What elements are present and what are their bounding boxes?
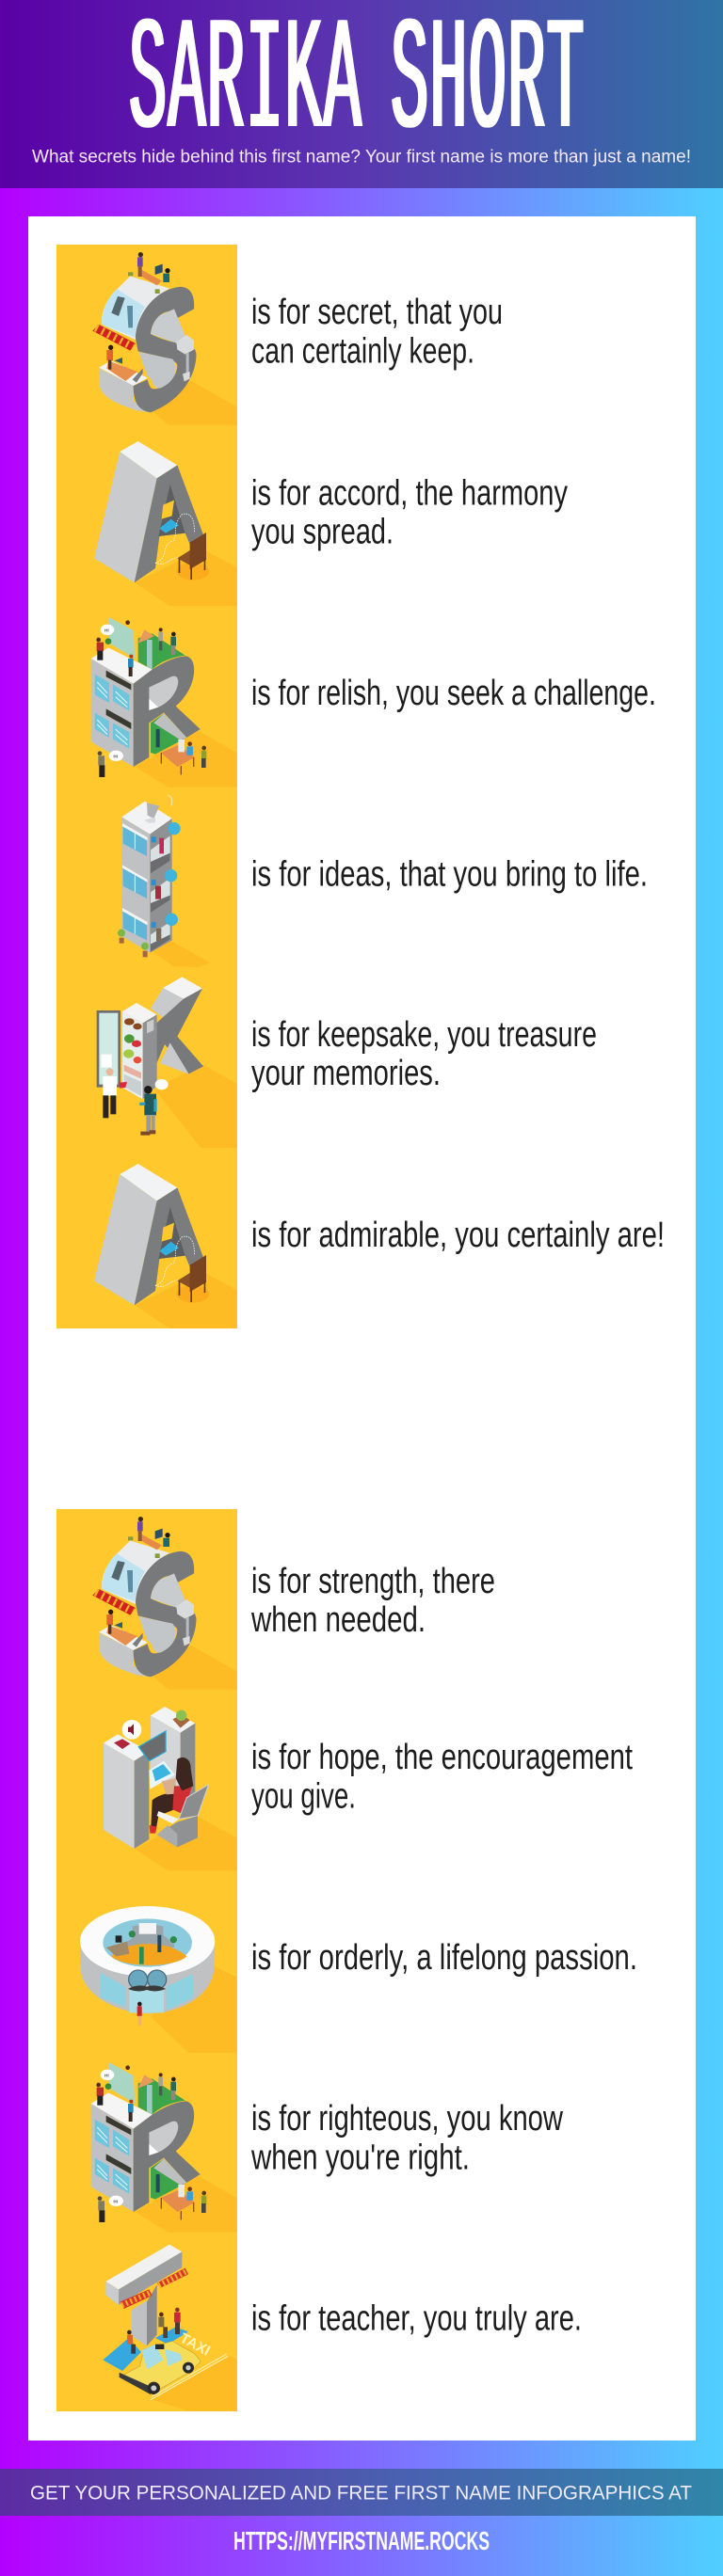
text: H is for hope: you give. bbox=[251, 1776, 356, 1816]
icon: letter H desk bbox=[104, 1707, 237, 1870]
text: A is for accord bbox=[251, 474, 568, 551]
yellow column: last name bbox=[56, 1509, 237, 2411]
icon: letter S building bbox=[92, 252, 237, 425]
text: R is for righteous bbox=[250, 2099, 563, 2177]
header band bbox=[0, 0, 723, 188]
icon: letter R building (repeat): HI bbox=[104, 2073, 109, 2077]
icon: letter R building (repeat) bbox=[91, 2062, 237, 2233]
text: S is for strength bbox=[250, 1562, 495, 1640]
text: K is for keepsake: is for keepsake, you treasure bbox=[251, 1015, 597, 1055]
text: K is for keepsake bbox=[251, 1015, 597, 1093]
text: S is for secret: is for secret, that you bbox=[251, 293, 503, 332]
icon: letter R building bbox=[91, 617, 237, 787]
icon: letter R building: HI bbox=[113, 754, 118, 758]
text: S is for secret: can certainly keep. bbox=[251, 331, 474, 371]
text: R is for righteous: is for righteous, you know bbox=[251, 2099, 563, 2139]
white panel bbox=[28, 216, 696, 2441]
icon: letter A with chair (repeat) bbox=[94, 1164, 237, 1328]
text: S is for secret bbox=[251, 293, 503, 371]
icon: letter R building: HI bbox=[104, 628, 109, 632]
icon: letter R building (repeat): HI bbox=[113, 2199, 118, 2203]
yellow column: first name bbox=[56, 245, 237, 1328]
text: S is for strength: is for strength, there bbox=[251, 1562, 495, 1601]
icon: letter K with fridge and chef bbox=[97, 977, 237, 1148]
text: S is for strength: when needed. bbox=[250, 1600, 426, 1640]
text: R is for righteous: when you're right. bbox=[250, 2138, 470, 2177]
text: A is for accord: is for accord, the harmony bbox=[251, 474, 568, 514]
icon: letter O ring building bbox=[80, 1906, 237, 2053]
footer call to action: GET YOUR PERSONALIZED AND FREE FIRST NAME INFOGRAPHICS AT bbox=[30, 2482, 692, 2504]
icon: letter A with chair bbox=[94, 441, 237, 606]
footer band bbox=[0, 2469, 723, 2516]
footer url: HTTPS://MYFIRSTNAME.ROCKS bbox=[233, 2526, 490, 2555]
text: H is for hope bbox=[251, 1738, 633, 1816]
icon: letter I tower bbox=[118, 795, 210, 967]
subtitle: What secrets hide behind this first name? Your first name is more than just a name! bbox=[32, 147, 691, 167]
icon: letter T taxi stand: TAXI bbox=[177, 2330, 213, 2360]
text: A is for accord: you spread. bbox=[251, 512, 394, 551]
text: K is for keepsake: your memories. bbox=[251, 1054, 441, 1093]
icon: letter T taxi stand bbox=[103, 2245, 237, 2411]
text: T is for teacher: is for teacher, you truly are. bbox=[251, 2299, 582, 2339]
icon: letter S building (repeat) bbox=[92, 1517, 237, 1690]
